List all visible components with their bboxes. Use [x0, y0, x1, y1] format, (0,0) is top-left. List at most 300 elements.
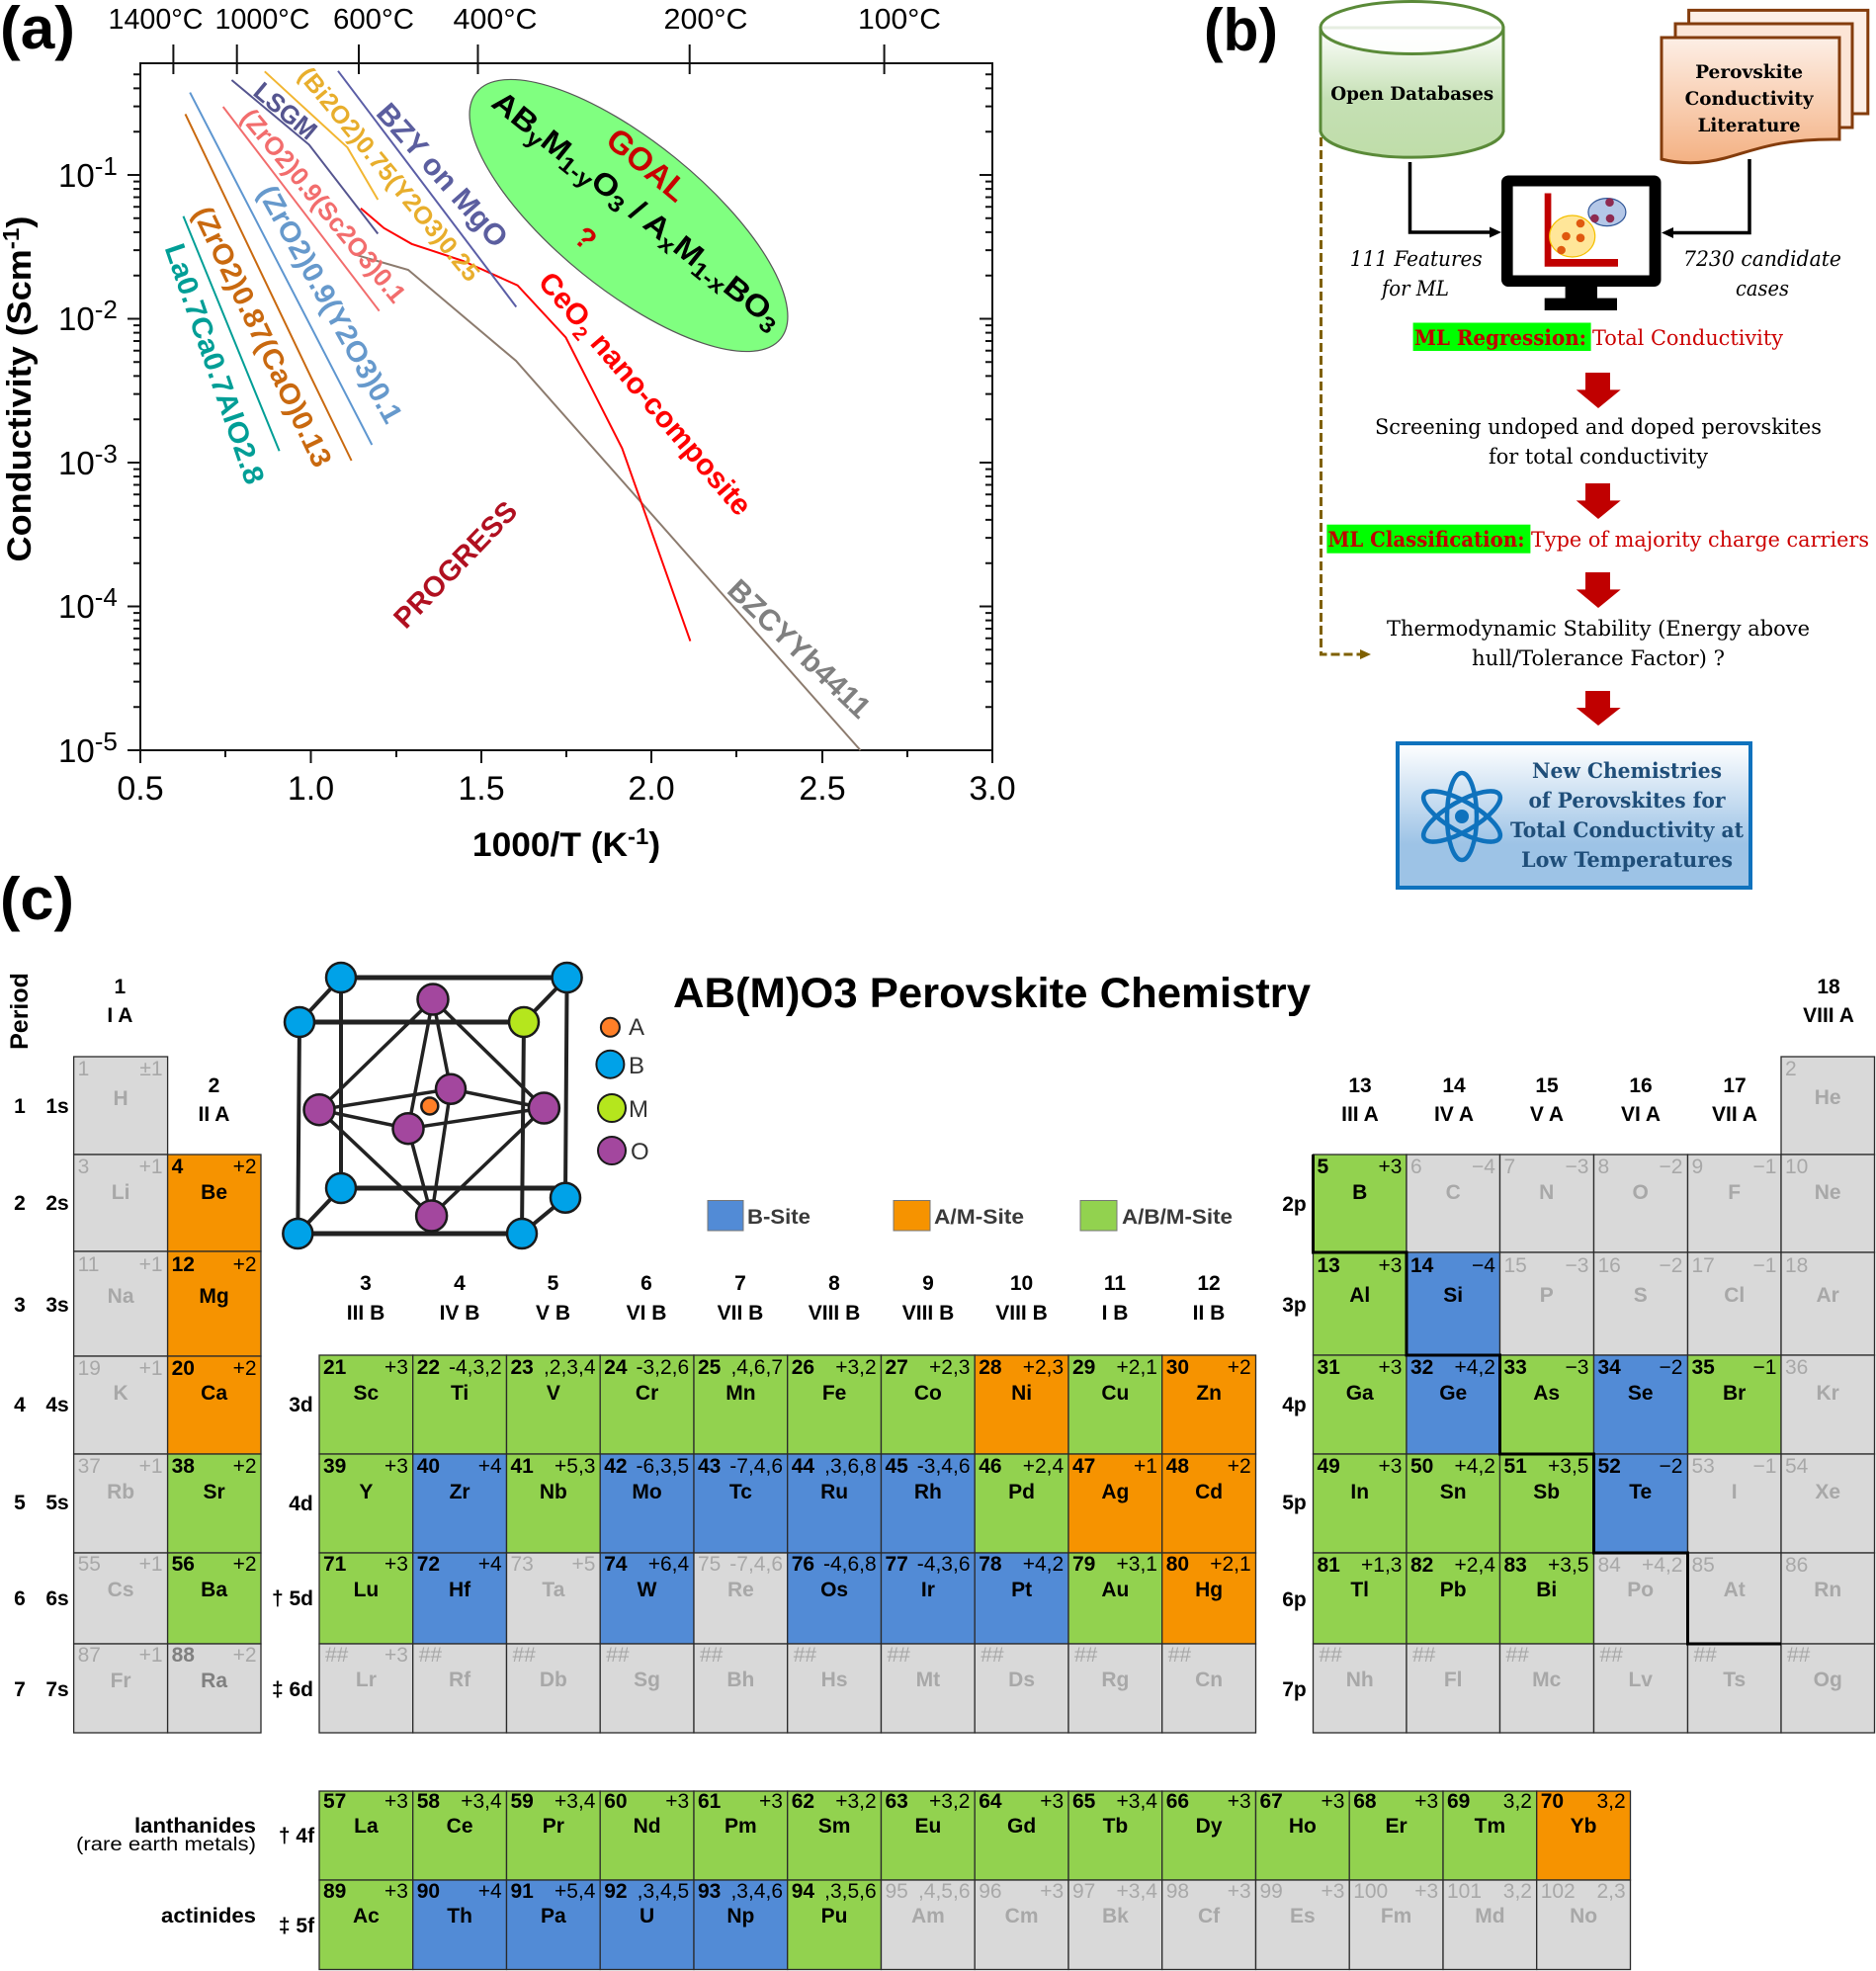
element: Cm: Cm [1005, 1905, 1039, 1928]
periodic table: lanthanides [319, 1790, 1631, 1880]
element: Mg [168, 1251, 261, 1356]
group headers: 2 [209, 1074, 219, 1097]
group headers: II A [199, 1103, 229, 1126]
element: Db: ## [512, 1644, 536, 1667]
element: Sm: 62 [792, 1790, 814, 1813]
element: V: V [547, 1382, 560, 1405]
element: Es: +3 [1322, 1880, 1344, 1903]
label: perovskite formula: 3 [602, 190, 629, 218]
element: Te: −2 [1660, 1455, 1682, 1478]
series label: (ZrO2)0.87(CaO)0.13: (ZrO2)0.87(CaO)0.13 [186, 202, 337, 472]
element: Er: +3 [1414, 1790, 1438, 1813]
element: Th [413, 1880, 506, 1969]
period and orbital labels: 3s [45, 1294, 69, 1317]
element: As [1500, 1355, 1593, 1454]
y axis tick labels [58, 151, 118, 769]
period and orbital labels: 4p [1282, 1394, 1307, 1416]
result text: of Perovskites for [1528, 788, 1726, 813]
result text: Low Temperatures [1521, 847, 1733, 872]
element: Sb: Sb [1533, 1481, 1560, 1503]
site legend: A/B/M-Site: A/B/M-Site [1122, 1206, 1233, 1229]
element: Fe [788, 1355, 882, 1454]
element: Cn: Cn [1195, 1669, 1223, 1691]
element: Ag: Ag [1101, 1481, 1129, 1503]
element: Nb: Nb [540, 1481, 567, 1503]
element: Rf: ## [419, 1644, 442, 1667]
step: ML classification: ML Classification: [1328, 527, 1524, 552]
element: Ra: Ra [201, 1670, 227, 1692]
label: perovskite formula: AB [486, 84, 545, 141]
element: Nb [506, 1454, 600, 1553]
element: Nd: +3 [665, 1790, 689, 1813]
element: W: W [638, 1579, 657, 1601]
element: Ce: Ce [447, 1815, 473, 1838]
element: Zr: Zr [450, 1481, 470, 1503]
element: Fe: Fe [822, 1382, 846, 1405]
element: Br: 35 [1692, 1356, 1715, 1379]
element: Ga: 31 [1317, 1356, 1340, 1379]
element: Ca: 20 [172, 1357, 195, 1380]
element: Cm: 96 [979, 1880, 1002, 1903]
element: No: 102 [1541, 1880, 1576, 1903]
element: Cd: 48 [1166, 1455, 1189, 1478]
element: K: +1 [139, 1357, 163, 1380]
element: Ho: 67 [1259, 1790, 1283, 1813]
step: ML regression: Total Conductivity [1592, 326, 1783, 350]
element: Ti: Ti [451, 1382, 469, 1405]
element: Cm: +3 [1040, 1880, 1064, 1903]
x axis title: -1 [628, 823, 648, 849]
element: Ta: 73 [510, 1553, 534, 1576]
element: Zn [1162, 1355, 1255, 1454]
element: Sm: Sm [818, 1815, 850, 1838]
icon: computer monitor with cluster chart [1501, 176, 1661, 310]
period and orbital labels: 7p [1282, 1678, 1307, 1701]
element: Mn: Mn [725, 1382, 756, 1405]
element: Zr: 40 [417, 1455, 440, 1478]
element: Zn: 30 [1166, 1356, 1189, 1379]
element: Mt: ## [888, 1644, 910, 1667]
x axis tick labels: 1.0 [288, 770, 334, 808]
element: Rh: Rh [914, 1481, 942, 1503]
group headers: III A [1341, 1103, 1379, 1126]
element: Re [694, 1553, 788, 1644]
element: La: +3 [384, 1790, 408, 1813]
element: Mg: Mg [199, 1285, 229, 1308]
element: Si: −4 [1472, 1254, 1495, 1277]
element: Rn: 86 [1785, 1554, 1808, 1577]
icon: atom [1416, 773, 1507, 860]
element: Cu: Cu [1101, 1382, 1129, 1405]
element: Lv: ## [1599, 1644, 1623, 1667]
element: Hf: 72 [417, 1553, 440, 1576]
element: Ho: Ho [1289, 1815, 1317, 1838]
period and orbital labels: ‡ 6d [272, 1678, 313, 1701]
y axis tick labels: 10 [58, 732, 95, 769]
text: 7230 candidate cases [1683, 247, 1841, 300]
element: Co [882, 1355, 975, 1454]
series label: BZCYYb4411: BZCYYb4411 [721, 573, 877, 725]
element: Np: Np [726, 1905, 754, 1928]
element: Fe: 26 [792, 1356, 814, 1379]
element: Ce [413, 1790, 506, 1880]
element: Ti: -4,3,2 [449, 1356, 502, 1379]
element: Au [1068, 1553, 1162, 1644]
element: Sg: ## [606, 1644, 630, 1667]
element: Sc: 21 [323, 1356, 347, 1379]
element: Sn: +4,2 [1455, 1455, 1495, 1478]
element: Mn: 25 [698, 1356, 722, 1379]
element: Pu [788, 1880, 882, 1969]
step: ML classification [1326, 525, 1869, 554]
element: Pd: 46 [979, 1455, 1002, 1478]
element: Mt [882, 1644, 975, 1733]
element: Fr [74, 1644, 168, 1733]
period and orbital labels: 1 [14, 1095, 26, 1118]
element: Pa: +5,4 [554, 1880, 596, 1903]
element: Ba: +2 [233, 1553, 257, 1576]
element: Os: Os [820, 1579, 848, 1601]
element: Se [1593, 1355, 1688, 1454]
element: In: 49 [1317, 1455, 1340, 1478]
element: F [1688, 1155, 1781, 1252]
group headers: 9 [922, 1272, 934, 1295]
element: Co: 27 [886, 1356, 908, 1379]
crystal legend: B [629, 1053, 644, 1079]
period and orbital labels: 3p [1282, 1294, 1307, 1317]
element: Sm [788, 1790, 882, 1880]
y axis tick labels: -2 [95, 295, 118, 324]
icon: perovskite crystal structure [283, 963, 582, 1248]
element: B: B [1352, 1181, 1367, 1204]
element: W: +6,4 [648, 1553, 690, 1576]
x axis tick labels: 2.5 [799, 770, 846, 808]
panel a: conductivity chart [0, 4, 1016, 864]
element: Sg: Sg [634, 1669, 660, 1691]
group headers: VIII B [902, 1302, 954, 1325]
element: Se: −2 [1660, 1356, 1682, 1379]
step: thermodynamic stability: hull/Tolerance Factor) ? [1472, 646, 1725, 670]
element: Fr: +1 [139, 1644, 163, 1667]
label: PROGRESS: PROGRESS [388, 495, 524, 635]
element: Ds [975, 1644, 1068, 1733]
group headers: III B [347, 1302, 384, 1325]
label: perovskite formula: M [535, 124, 578, 167]
group headers: 14 [1442, 1074, 1466, 1097]
element: Ge [1407, 1355, 1500, 1454]
element: Tb: Tb [1103, 1815, 1128, 1838]
step: ML classification: Type of majority charge carriers [1531, 528, 1869, 552]
element: Ni: 28 [979, 1356, 1002, 1379]
label: perovskite formula: 3 [753, 311, 781, 339]
group headers: 3 [360, 1272, 372, 1295]
element: Ra [168, 1644, 261, 1733]
element: Tc: 43 [698, 1455, 721, 1478]
group headers: I A [107, 1004, 132, 1027]
element: Ir: Ir [921, 1579, 935, 1601]
element: Bh: ## [700, 1644, 724, 1667]
element: Pb: Pb [1440, 1579, 1467, 1601]
series label: La0.7Ca0.7AlO2.8: La0.7Ca0.7AlO2.8 [158, 240, 270, 488]
y axis title: Conductivity (Scm [1, 249, 39, 561]
element: Ba: 56 [172, 1553, 195, 1576]
text: 111 features: 111 Features [1350, 247, 1483, 271]
element: Yb [1537, 1790, 1631, 1880]
group headers: VI B [627, 1302, 666, 1325]
label: GOAL: GOAL [600, 121, 695, 209]
element: C: 6 [1410, 1156, 1422, 1178]
element: Ir: -4,3,6 [917, 1553, 971, 1576]
element: F: F [1728, 1181, 1741, 1204]
element: Nh: Nh [1346, 1669, 1374, 1691]
element: Ir [882, 1553, 975, 1644]
element: Sm: +3,2 [835, 1790, 877, 1813]
element: Na: 11 [78, 1253, 99, 1276]
element: Md [1443, 1880, 1537, 1969]
element: Po: 84 [1597, 1554, 1621, 1577]
element: Sr: +2 [233, 1455, 257, 1478]
label: perovskite formula: BO [718, 269, 778, 327]
element: Xe: 54 [1785, 1455, 1809, 1478]
element: Sc [319, 1355, 413, 1454]
element: Mo: -6,3,5 [636, 1455, 689, 1478]
result text: New Chemistries [1532, 758, 1722, 783]
element: H: H [114, 1087, 128, 1110]
period and orbital labels: 4 [14, 1394, 26, 1416]
periodic table: main group right block [1313, 1057, 1874, 1733]
group headers: 1 [115, 976, 127, 998]
step: screening: Screening undoped and doped perovskites [1375, 415, 1822, 439]
element: Fe: +3,2 [835, 1356, 877, 1379]
element: Li: 3 [78, 1156, 89, 1178]
element: N: N [1539, 1181, 1554, 1204]
goal ellipse [430, 35, 827, 396]
icon: open databases cylinder: Open Databases [1330, 83, 1493, 105]
element: Db: Db [540, 1669, 567, 1691]
periodic table: transition metals [319, 1355, 1255, 1733]
element: Be: +2 [233, 1156, 257, 1178]
element: Tl [1313, 1553, 1407, 1644]
element: In: +3 [1379, 1455, 1402, 1478]
period and orbital labels: 5 [14, 1492, 26, 1514]
series label: BZY on MgO: BZY on MgO [370, 97, 514, 254]
step: ML regression: ML Regression: [1414, 325, 1586, 350]
crystal legend: M [629, 1096, 648, 1123]
element: Cu [1068, 1355, 1162, 1454]
element: Cl: Cl [1724, 1284, 1745, 1307]
element: Ho: +3 [1322, 1790, 1344, 1813]
element: Mc: ## [1506, 1644, 1529, 1667]
element: Hf: Hf [449, 1579, 471, 1601]
element: Ts: ## [1694, 1644, 1717, 1667]
site legend: B-Site: B-Site [747, 1206, 810, 1229]
element: Tm: 69 [1447, 1790, 1470, 1813]
y axis tick labels: 10 [58, 588, 95, 625]
element: V [506, 1355, 600, 1454]
series label: LSGM: LSGM [248, 76, 323, 145]
element: P: −3 [1566, 1254, 1589, 1277]
arrow: red block 3 [1577, 572, 1621, 608]
element: Ir: 77 [886, 1553, 908, 1576]
period and orbital labels: † 5d [272, 1587, 313, 1610]
element: Pd: Pd [1008, 1481, 1035, 1503]
element: Er: 68 [1353, 1790, 1377, 1813]
element: Os: 76 [792, 1553, 814, 1576]
element: Og [1781, 1644, 1874, 1733]
element: F: −1 [1753, 1156, 1777, 1178]
element: K: K [114, 1382, 128, 1405]
element: Re: 75 [698, 1553, 721, 1576]
element: Ga: +3 [1379, 1356, 1402, 1379]
element: Be [168, 1155, 261, 1251]
element: La: La [354, 1815, 379, 1838]
element: Sb: +3,5 [1548, 1455, 1589, 1478]
element: Fm: +3 [1414, 1880, 1438, 1903]
element: Ce: 58 [417, 1790, 440, 1813]
element: Hf [413, 1553, 506, 1644]
element: Pm: Pm [725, 1815, 757, 1838]
element: Po: +4,2 [1642, 1554, 1682, 1577]
arrow: dashed feedback from databases [1321, 137, 1371, 659]
site legend: B-Site [708, 1200, 810, 1231]
element: Th: Th [447, 1905, 472, 1928]
element: Ge: 32 [1410, 1356, 1433, 1379]
period and orbital labels: 6 [14, 1587, 26, 1610]
element: Bk: +3,4 [1117, 1880, 1157, 1903]
element: Rg: ## [1074, 1644, 1098, 1667]
element: F: 9 [1692, 1156, 1703, 1178]
group headers: 17 [1723, 1074, 1747, 1097]
element: O: O [1633, 1181, 1649, 1204]
element: B [1313, 1155, 1407, 1252]
element: Cm [975, 1880, 1068, 1969]
element: Bi: +3,5 [1548, 1554, 1589, 1577]
element: Tm: 3,2 [1503, 1790, 1532, 1813]
x axis tick labels: 1.5 [458, 770, 505, 808]
element: Np [694, 1880, 788, 1969]
element: Mn: ,4,6,7 [730, 1356, 783, 1379]
label: perovskite formula: / A [616, 188, 677, 247]
element: Np: ,3,4,6 [730, 1880, 783, 1903]
period and orbital labels [14, 1095, 1307, 1937]
y axis title: -1 [0, 228, 25, 249]
element: Al: +3 [1379, 1254, 1402, 1277]
element: Cs: Cs [108, 1579, 134, 1601]
element: Sr: 38 [172, 1455, 195, 1478]
element: Re: Re [727, 1579, 754, 1601]
element: Gd: +3 [1040, 1790, 1064, 1813]
group headers: I B [1102, 1302, 1128, 1325]
element: Re: -7,4,6 [729, 1553, 783, 1576]
chart frame and ticks [128, 44, 992, 763]
x axis title: 1000/T (K [472, 827, 628, 864]
element: C: −4 [1472, 1156, 1495, 1178]
element: Yb: 3,2 [1596, 1790, 1626, 1813]
element: Be: 4 [172, 1156, 184, 1178]
element: Mo: Mo [632, 1481, 662, 1503]
element: Gd: Gd [1007, 1815, 1036, 1838]
element: In [1313, 1454, 1407, 1553]
element: Al: Al [1349, 1284, 1370, 1307]
period and orbital labels: 1s [45, 1095, 69, 1118]
arrow: red block 4 [1577, 691, 1621, 726]
element: Sn: Sn [1440, 1481, 1467, 1503]
element: K: 19 [78, 1357, 101, 1380]
element: Cl: −1 [1753, 1254, 1777, 1277]
element: U: ,3,4,5 [638, 1880, 689, 1903]
step: screening: for total conductivity [1489, 445, 1708, 469]
element: Br: −1 [1753, 1356, 1777, 1379]
element: Co: +2,3 [929, 1356, 971, 1379]
element: Db [506, 1644, 600, 1733]
element: Ga: Ga [1346, 1382, 1374, 1405]
element: Ni: Ni [1011, 1382, 1032, 1405]
element: Ce: +3,4 [461, 1790, 502, 1813]
period and orbital labels: 6p [1282, 1588, 1307, 1611]
icon: open databases cylinder [1321, 2, 1503, 157]
element: Al: 13 [1317, 1254, 1340, 1277]
element: U: U [640, 1905, 654, 1928]
element: Au: +3,1 [1117, 1553, 1157, 1576]
icon: literature document stack: Perovskite [1695, 61, 1803, 83]
element: K [74, 1356, 168, 1454]
element: Kr [1781, 1355, 1874, 1454]
element: Pu: ,3,5,6 [824, 1880, 877, 1903]
element: Ge: Ge [1439, 1382, 1467, 1405]
periodic table: actinides [319, 1880, 1631, 1969]
x axis tick labels [117, 770, 1016, 808]
period and orbital labels: 3 [14, 1294, 26, 1317]
element: Lu: +3 [384, 1553, 408, 1576]
element: Pu: 94 [792, 1880, 814, 1903]
element: N: −3 [1566, 1156, 1589, 1178]
element: Sr: Sr [204, 1481, 225, 1503]
series label: (Bi2O2)0.75(Y2O3)0.25: (Bi2O2)0.75(Y2O3)0.25 [293, 62, 485, 287]
period and orbital labels: 2 [14, 1192, 26, 1215]
element: He: 2 [1785, 1058, 1797, 1080]
element: Rn [1781, 1553, 1874, 1644]
group headers: IV B [440, 1302, 479, 1325]
arrow: databases to computer [1409, 162, 1501, 237]
element: Po [1593, 1553, 1688, 1644]
element: Na [74, 1251, 168, 1356]
step: screening [1375, 415, 1822, 469]
element: Tb [1068, 1790, 1162, 1880]
element: Te: 52 [1597, 1455, 1621, 1478]
element: Fr: Fr [111, 1670, 131, 1692]
element: Gd [975, 1790, 1068, 1880]
top temperature axis labels: 1400°C [109, 4, 204, 36]
element: Ba [168, 1553, 261, 1644]
element: O [1593, 1155, 1688, 1252]
period and orbital labels: 6s [45, 1587, 69, 1610]
element: Lr: +3 [384, 1644, 408, 1667]
element: Os [788, 1553, 882, 1644]
element: Bk [1068, 1880, 1162, 1969]
element: Zn: Zn [1196, 1382, 1222, 1405]
element: Au: 79 [1072, 1553, 1095, 1576]
periodic table: groups 1 and 2 [74, 1057, 261, 1733]
element: Fl: ## [1412, 1644, 1436, 1667]
element: Tl: 81 [1317, 1554, 1340, 1577]
group headers: II B [1193, 1302, 1225, 1325]
element: Li: Li [112, 1181, 129, 1204]
element: Ne: Ne [1815, 1181, 1841, 1204]
label: perovskite formula: 1-x [686, 257, 730, 300]
label: perovskite formula: M [667, 229, 710, 273]
element: Ca: Ca [201, 1382, 227, 1405]
group headers: 6 [640, 1272, 652, 1295]
